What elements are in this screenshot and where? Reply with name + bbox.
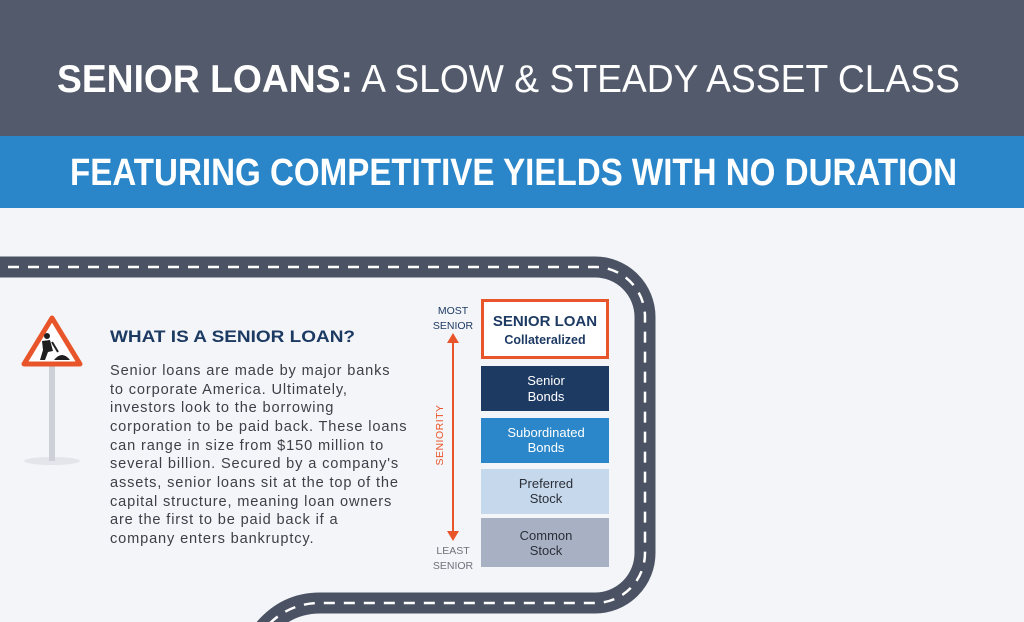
body text: corporation to be paid back. These loans: [110, 419, 407, 435]
seniority axis: SENIOR: [433, 320, 474, 332]
box: preferred stock: [481, 469, 609, 514]
heading: what is a senior loan: WHAT IS A SENIOR LOAN?: [110, 327, 355, 346]
header: title band: [0, 0, 1024, 136]
seniority axis: [433, 305, 474, 572]
box: common stock: [481, 518, 609, 567]
box: common stock: Common: [520, 528, 572, 543]
body text: capital structure, meaning loan owners: [110, 494, 392, 510]
box: preferred stock: Stock: [530, 491, 563, 506]
seniority axis: SENIORITY: [434, 404, 446, 466]
box: senior loan: SENIOR LOAN: [493, 313, 597, 330]
capital structure stack: [481, 300, 609, 567]
icon: road work sign: [24, 318, 80, 465]
seniority axis: LEAST: [436, 545, 470, 557]
box: senior loan: Collateralized: [504, 333, 586, 347]
body text: can range in size from $150 million to: [110, 438, 384, 454]
body text: assets, senior loans sit at the top of the: [110, 475, 399, 491]
body text: [110, 363, 407, 547]
body text: Senior loans are made by major banks: [110, 363, 390, 379]
body text: to corporate America. Ultimately,: [110, 382, 348, 398]
seniority axis: MOST: [438, 305, 469, 317]
body text: company enters bankruptcy.: [110, 531, 314, 547]
box: subordinated bonds: Subordinated: [507, 425, 585, 440]
header: subtitle band: [0, 136, 1024, 208]
box: subordinated bonds: [481, 418, 609, 463]
body text: several billion. Secured by a company's: [110, 456, 399, 472]
body text: are the first to be paid back if a: [110, 512, 338, 528]
box: common stock: Stock: [530, 543, 563, 558]
box: senior bonds: Senior: [527, 373, 565, 388]
box: subordinated bonds: Bonds: [528, 440, 565, 455]
body text: investors look to the borrowing: [110, 400, 334, 416]
box: senior bonds: [481, 366, 609, 411]
seniority axis: SENIOR: [433, 560, 474, 572]
box: preferred stock: Preferred: [519, 476, 573, 491]
box: senior bonds: Bonds: [528, 389, 565, 404]
box: senior loan: [482, 300, 608, 358]
title: SENIOR LOANS: A SLOW & STEADY ASSET CLASS: [57, 58, 960, 101]
road: [0, 267, 645, 622]
